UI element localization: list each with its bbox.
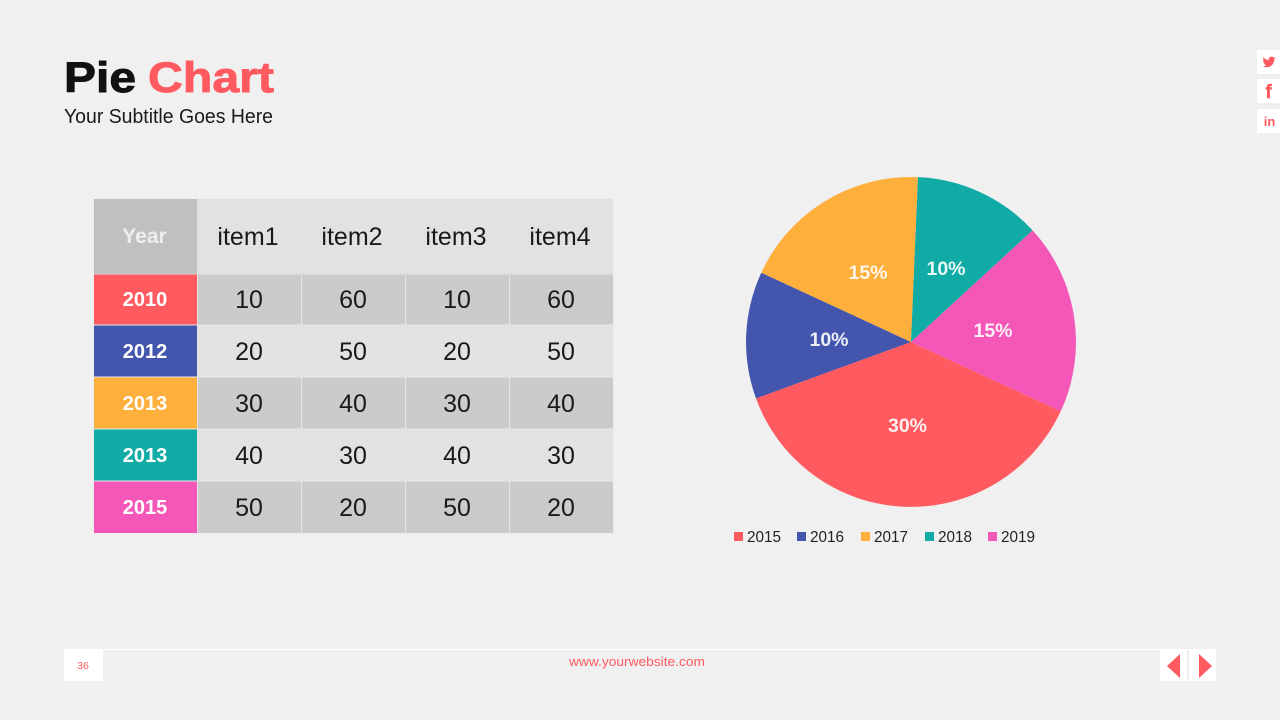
table row 2015: 2015 xyxy=(123,497,167,519)
website url: www.yourwebsite.com xyxy=(568,654,705,669)
table row 2013 orange xyxy=(94,378,613,428)
slice: 2018 10% xyxy=(911,177,1033,342)
pie percentage labels: 30% xyxy=(888,415,927,437)
table header row: item2 xyxy=(321,223,383,251)
table row 2013 teal: 40 xyxy=(235,442,263,470)
table row 2012 xyxy=(94,326,613,376)
title: Pie Chart xyxy=(64,54,274,102)
pie percentage labels: 10% xyxy=(926,258,966,280)
footer rule xyxy=(64,649,1216,650)
pie chart xyxy=(746,177,1076,507)
table header row: item1 xyxy=(217,223,279,251)
pie percentage labels: 15% xyxy=(973,320,1013,342)
slice: 2015 30% xyxy=(756,342,1061,507)
table row 2015: 50 xyxy=(443,494,471,522)
slice: 2016 10% xyxy=(746,273,911,398)
table row 2012: 50 xyxy=(547,338,575,366)
social icons xyxy=(1257,50,1280,133)
table row 2013 teal: 30 xyxy=(339,442,367,470)
table row 2015: 20 xyxy=(339,494,367,522)
table row 2012: 2012 xyxy=(123,341,167,363)
table row 2013 teal: 2013 xyxy=(123,445,167,467)
arrow: previous xyxy=(1160,650,1187,681)
table row 2010: 60 xyxy=(339,286,367,314)
pie percentage labels xyxy=(809,258,1013,437)
table row 2013 orange: 30 xyxy=(235,390,263,418)
table row 2013 teal: 30 xyxy=(547,442,575,470)
subtitle: Your Subtitle Goes Here xyxy=(64,106,273,128)
table row 2013 orange: 2013 xyxy=(123,393,167,415)
table row 2015: 50 xyxy=(235,494,263,522)
table header row: item4 xyxy=(529,223,591,251)
table header row xyxy=(94,199,613,274)
table row 2013 orange: 30 xyxy=(443,390,471,418)
table row 2013 orange: 40 xyxy=(339,390,367,418)
table row 2010: 10 xyxy=(235,286,263,314)
table row 2015: 20 xyxy=(547,494,575,522)
data table xyxy=(94,198,614,534)
table row 2010: 10 xyxy=(443,286,471,314)
table row 2012: 50 xyxy=(339,338,367,366)
page number: 36 xyxy=(77,660,89,672)
table row 2012: 20 xyxy=(443,338,471,366)
slice: 2017 15% xyxy=(761,177,918,342)
title: Pie Chart: Pie xyxy=(64,54,136,102)
arrow: next xyxy=(1189,650,1216,681)
slice: 2019 15% xyxy=(911,230,1076,411)
table row 2010: 60 xyxy=(547,286,575,314)
table row 2010: 2010 xyxy=(123,289,167,311)
pie legend: 2019 xyxy=(1001,529,1035,546)
pie legend xyxy=(734,529,1035,546)
icon: facebook: f xyxy=(1265,82,1272,103)
table row 2010 xyxy=(94,274,613,324)
icon: linkedin: in xyxy=(1264,114,1275,129)
pie legend: 2016 xyxy=(810,529,844,546)
table row 2013 orange: 40 xyxy=(547,390,575,418)
table header row: item3 xyxy=(425,223,487,251)
table row 2013 teal xyxy=(94,430,613,480)
table row 2013 teal: 40 xyxy=(443,442,471,470)
icon: twitter xyxy=(1257,50,1280,74)
pie percentage labels: 10% xyxy=(809,329,849,351)
pie legend: 2017 xyxy=(874,529,908,546)
pie percentage labels: 15% xyxy=(848,262,888,284)
page number xyxy=(64,650,103,681)
table row 2012: 20 xyxy=(235,338,263,366)
table row 2015 xyxy=(94,482,613,533)
pie legend: 2018 xyxy=(938,529,972,546)
title: Pie Chart: Chart xyxy=(148,54,274,102)
pie legend: 2015 xyxy=(747,529,781,546)
table header row: Year xyxy=(122,225,167,248)
